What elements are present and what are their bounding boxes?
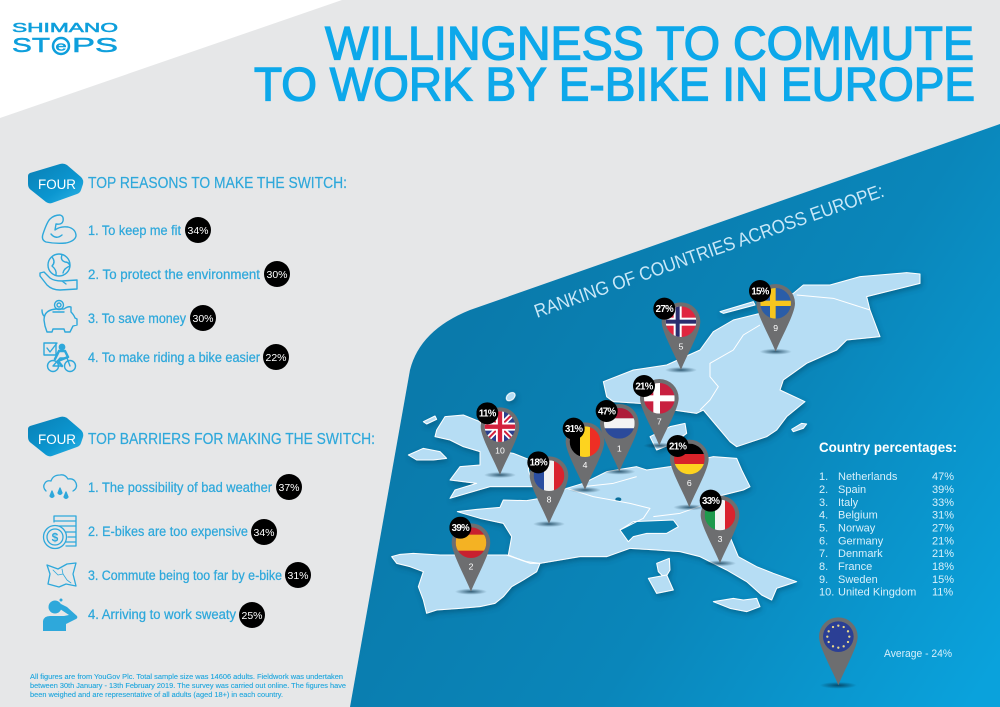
- text: country percentages: 18%: [932, 561, 954, 573]
- footnote: between 30th January - 13th February 2019. The survey was carried out online. The figures have: [30, 683, 346, 690]
- pin 9: Sweden: 15%: [751, 286, 770, 297]
- heading: top reasons: TOP REASONS TO MAKE THE SWITCH:: [88, 175, 347, 192]
- map of Europe: [392, 273, 920, 689]
- text: country percentages: 5.: [819, 522, 828, 534]
- pin 5: Norway: 27%: [656, 304, 674, 315]
- text: country percentages: France: [838, 561, 872, 573]
- text: country percentages: 3.: [819, 497, 828, 509]
- text: country percentages: 47%: [932, 471, 954, 483]
- value badge: 34%: [251, 519, 277, 545]
- pin 8: France: 18%: [530, 458, 548, 469]
- panel: blue map panel: [350, 124, 1000, 707]
- text: country percentages: 1.: [819, 471, 828, 483]
- pin 10: United Kingdom: 11%: [479, 409, 497, 420]
- badge: four: [28, 164, 83, 203]
- text: country percentages: Germany: [838, 536, 884, 548]
- pin 1: Netherlands: 47%: [598, 406, 616, 417]
- icon: coins: [44, 516, 76, 548]
- text: country percentages: 21%: [932, 536, 954, 548]
- map: inland sea and borders: [507, 295, 870, 563]
- pin 4: Belgium: 31%: [565, 424, 583, 435]
- pin 3: Italy: 3: [718, 534, 723, 544]
- item: too expensive: 2. E-bikes are too expensive: [88, 524, 248, 539]
- pin 6: Germany: 21%: [669, 441, 687, 452]
- text: country percentages: 8.: [819, 561, 828, 573]
- text: country percentages: 4.: [819, 510, 828, 522]
- value badge: 34%: [185, 217, 211, 243]
- pin 5: Norway: [653, 298, 700, 373]
- pin 1: Netherlands: [596, 400, 639, 475]
- badge: four: FOUR: [38, 432, 76, 447]
- item: too far: 3. Commute being too far by e-bike: [88, 568, 282, 583]
- text: country percentages: 11%: [932, 586, 953, 598]
- text: country percentages: Italy: [838, 497, 859, 509]
- section: four top barriers: [28, 417, 375, 631]
- logo: Shimano Steps: ST: [12, 35, 50, 57]
- icon: coins: $: [52, 530, 59, 544]
- pin 2: Spain: [449, 517, 490, 595]
- value badge: 25%: [239, 602, 265, 628]
- icon: globe in hand: [40, 254, 77, 290]
- text: country percentages: Sweden: [838, 574, 878, 586]
- pin 6: Germany: [667, 435, 709, 510]
- title: TO WORK BY E-BIKE IN EUROPE: [254, 58, 975, 110]
- pin 10: United Kingdom: [476, 402, 519, 478]
- icon: rain cloud: [44, 475, 77, 498]
- pin 8: France: 8: [547, 495, 552, 505]
- text: country percentages: Belgium: [838, 510, 878, 522]
- text: country percentages: 7.: [819, 548, 828, 560]
- white header corner: [0, 0, 342, 118]
- text: country percentages: 33%: [932, 497, 954, 509]
- title: WILLINGNESS TO COMMUTE: [325, 16, 974, 70]
- pin 2: Spain: 2: [469, 562, 474, 572]
- value badge: 30%: 30%: [266, 269, 288, 281]
- value badge: 22%: [263, 344, 289, 370]
- text: average: Average - 24%: [884, 648, 952, 660]
- pin 9: Sweden: 9: [773, 323, 778, 333]
- text: country percentages: 15%: [932, 574, 954, 586]
- section: four top reasons: [28, 164, 347, 372]
- icon: sweaty person: [43, 598, 77, 631]
- text: country percentages: Spain: [838, 484, 866, 496]
- item: keep fit: 1. To keep me fit: [88, 223, 181, 238]
- pin 7: Denmark: 7: [657, 417, 662, 427]
- text: country percentages: 21%: [932, 548, 954, 560]
- pin 3: Italy: 33%: [702, 496, 720, 507]
- heading: country percentages: Country percentages:: [819, 440, 957, 455]
- value badge: 30%: [264, 261, 290, 287]
- text: country percentages: 10.: [819, 586, 834, 598]
- badge: four: [28, 417, 83, 456]
- pin 3: Italy: [700, 490, 739, 566]
- text: country percentages: 6.: [819, 536, 828, 548]
- panel heading: ranking of countries: RANKING OF COUNTRIES ACROSS EUROPE:: [532, 181, 887, 323]
- text: country percentages: [819, 440, 957, 598]
- item: bad weather: 1. The possibility of bad weather: [88, 480, 272, 495]
- pin 5: Norway: 5: [679, 342, 684, 352]
- text: country percentages: 31%: [932, 510, 954, 522]
- value badge: 22%: 22%: [265, 352, 287, 364]
- text: country percentages: Netherlands: [838, 471, 898, 483]
- item: environment: 2. To protect the environment: [88, 267, 260, 282]
- value badge: 37%: 37%: [278, 482, 300, 494]
- icon: folded map: [47, 563, 76, 587]
- footnote: All figures are from YouGov Plc. Total sample size was 14606 adults. Fieldwork was undertaken: [30, 674, 343, 681]
- icon: cyclist with checkbox: [44, 343, 76, 372]
- pin 8: France: [527, 451, 568, 527]
- footnote: been weighed and are representative of all adults (aged 18+) in each country.: [30, 692, 283, 699]
- logo: Shimano Steps: e: [56, 38, 66, 54]
- pin 4: Belgium: [563, 418, 604, 493]
- pin 1: Netherlands: 1: [617, 443, 622, 453]
- text: country percentages: Norway: [838, 522, 876, 534]
- pin 2: Spain: 39%: [452, 523, 470, 534]
- text: country percentages: United Kingdom: [838, 586, 916, 598]
- logo: Shimano Steps: [12, 21, 118, 57]
- title: [254, 16, 975, 110]
- text: country percentages: 39%: [932, 484, 954, 496]
- pin 4: Belgium: 4: [583, 460, 588, 470]
- value badge: 30%: [190, 305, 216, 331]
- text: country percentages: 2.: [819, 484, 828, 496]
- pin 10: United Kingdom: 10: [495, 446, 505, 456]
- item: sweaty: 4. Arriving to work sweaty: [88, 607, 236, 622]
- badge: four: FOUR: [38, 177, 76, 192]
- item: easier riding: 4. To make riding a bike easier: [88, 350, 260, 365]
- value badge: 31%: [285, 562, 311, 588]
- pin 9: Sweden: [749, 280, 795, 355]
- pin 7: Denmark: [633, 375, 679, 449]
- text: country percentages: Denmark: [838, 548, 883, 560]
- text: country percentages: 27%: [932, 522, 954, 534]
- pin 6: Germany: 6: [687, 478, 692, 488]
- value badge: 31%: 31%: [287, 570, 309, 582]
- value badge: 34%: 34%: [187, 225, 209, 237]
- pin: EU average: [819, 617, 858, 689]
- icon: piggy bank: [42, 300, 77, 332]
- footnote: [30, 674, 346, 699]
- value badge: 30%: 30%: [192, 313, 214, 325]
- value badge: 25%: 25%: [241, 610, 263, 622]
- heading: top barriers: TOP BARRIERS FOR MAKING THE SWITCH:: [88, 431, 375, 448]
- logo: Shimano Steps: SHIMANO: [12, 21, 118, 35]
- value badge: 34%: 34%: [253, 527, 275, 539]
- pin 7: Denmark: 21%: [635, 381, 654, 392]
- value badge: 37%: [276, 474, 302, 500]
- text: country percentages: 9.: [819, 574, 828, 586]
- item: save money: 3. To save money: [88, 311, 186, 326]
- logo: Shimano Steps: PS: [72, 35, 118, 57]
- icon: flexed arm: [42, 215, 76, 243]
